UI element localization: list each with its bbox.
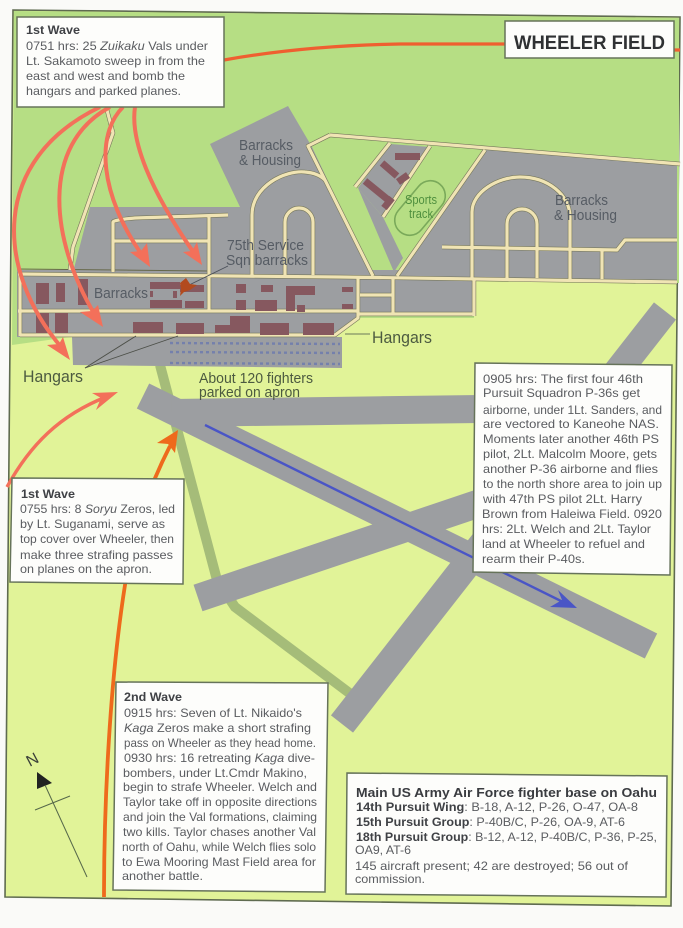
arrow: inbound route line to title: [224, 44, 680, 60]
label: fighters on apron: About 120 fighters: [199, 371, 313, 387]
body text: 0930 hrs: 16 retreating Kaga dive-: [124, 751, 315, 765]
body text: on planes on the apron.: [20, 562, 152, 576]
callout: 0905 hrs: airborne, under 1Lt. Sanders, and: [483, 403, 662, 417]
body text: 0915 hrs: Seven of Lt. Nikaido's: [124, 706, 302, 720]
map labels: Barracks: [555, 193, 608, 209]
map labels: Sqn barracks: [226, 253, 308, 269]
callout: 0905 hrs: hrs: 2Lt. Welch and 2Lt. Taylor: [482, 522, 651, 536]
runways: [143, 311, 665, 724]
body text: by Lt. Suganami, serve as: [20, 517, 165, 531]
unit list: 14th Pursuit Wing : B-18, A-12, P-26, O-47, OA-8: [356, 800, 638, 814]
callout: 2nd Wave: [113, 682, 328, 892]
callout: 0905 hrs: land at Wheeler to refuel and: [482, 537, 645, 551]
callout: 0905 hrs: Brown from Haleiwa Field. 0920: [482, 507, 662, 521]
body text: make three strafing passes: [20, 548, 173, 562]
arrow: US fighter take-off: [205, 425, 577, 608]
body text: [20, 502, 175, 576]
body text: Taylor take off in opposite directions: [123, 795, 317, 809]
arrows: first wave bomb runs: [14, 107, 194, 348]
label: hangars left with leader lines: Hangars: [23, 367, 83, 386]
icon: north arrow: N: [24, 750, 42, 771]
arrow: Soryu Zeros: [7, 392, 118, 487]
callout: 1st Wave Soryu: [10, 478, 184, 584]
body text: another battle.: [122, 869, 203, 883]
unit list: [355, 800, 657, 886]
unit list: 145 aircraft present; 42 are destroyed; 56 out of: [355, 859, 629, 873]
callout: 0905 hrs: 0905 hrs: The first four 46th: [483, 372, 643, 386]
map labels: [94, 138, 617, 302]
callout: 1st Wave Zuikaku: [17, 17, 224, 107]
callout: 0905 hrs: pilot, 2Lt. Malcolm Moore, gets: [483, 447, 657, 461]
base grey areas: [17, 106, 677, 368]
label: hangars right with leader line: [345, 328, 432, 347]
callout: 0905 hrs: another P-36 airborne and flies: [483, 462, 658, 476]
body text: and join the Val formations, claiming: [123, 810, 317, 824]
body text: [26, 39, 208, 98]
label: hangars left with leader lines: [23, 336, 178, 386]
sports track: Sports: [405, 192, 437, 207]
unit list: 15th Pursuit Group : P-40B/C, P-26, OA-9, AT-6: [356, 815, 625, 829]
label: fighters on apron: [199, 371, 313, 401]
body text: top cover over Wheeler, then: [20, 532, 174, 546]
road network: [17, 110, 680, 336]
map labels: Barracks: [94, 286, 148, 302]
callout: 0905 hrs: rearm their P-40s.: [482, 552, 585, 566]
body text: bombers, under Lt.Cmdr Makino,: [123, 766, 307, 780]
heading: 1st Wave: [26, 23, 80, 37]
unit list: commission.: [355, 872, 425, 886]
label: hangars right with leader line: Hangars: [372, 328, 432, 347]
body text: hangars and parked planes.: [26, 84, 181, 98]
arrow: 75th Service Sqn leader and hit marker: [180, 266, 228, 296]
arrowheads: first wave bomb runs: [47, 242, 202, 360]
map labels: & Housing: [554, 208, 617, 224]
unit list: 18th Pursuit Group : B-12, A-12, P-40B/C, P-36, P-25,: [356, 830, 657, 844]
map labels: 75th Service: [227, 238, 304, 254]
arrow: second wave approach: [104, 430, 178, 897]
heading: Main US Army Air Force fighter base on Oahu: [356, 785, 657, 800]
body text: 0751 hrs: 25 Zuikaku Vals under: [26, 39, 208, 53]
body text: Lt. Sakamoto sweep in from the: [26, 54, 205, 68]
body text: [122, 706, 317, 883]
body text: begin to strafe Wheeler. Welch and: [123, 780, 317, 794]
body text: east and west and bomb the: [26, 69, 185, 83]
label: fighters on apron: parked on apron: [199, 385, 300, 401]
body text: pass on Wheeler as they head home.: [124, 736, 316, 750]
sports track: [389, 175, 451, 241]
callout: 0905 hrs: Pursuit Squadron P-36s get: [483, 386, 641, 400]
parked fighters on apron: [170, 343, 340, 364]
sports track: track: [409, 206, 433, 221]
heading: 1st Wave: [21, 487, 75, 501]
body text: Kaga Zeros make a short strafing: [124, 721, 311, 735]
unit list: OA9, AT-6: [355, 843, 411, 857]
callout: base summary: [346, 773, 667, 897]
callout: 0905 hrs: with 47th PS pilot 2Lt. Harry: [482, 492, 642, 506]
heading: 2nd Wave: [124, 690, 182, 704]
callout: 0905 hrs: to the north shore area to join up: [483, 477, 662, 491]
body text: 0755 hrs: 8 Soryu Zeros, led: [20, 502, 175, 516]
body text: to Ewa Mooring Mast Field area for: [122, 855, 316, 869]
buildings: [36, 153, 420, 335]
title: [505, 21, 674, 58]
map labels: & Housing: [239, 153, 301, 169]
callout: 0905 hrs: are vectored to Kaneohe NAS.: [483, 417, 659, 431]
callout: 0905 hrs: [473, 363, 672, 575]
body text: two kills. Taylor chases another Val: [123, 825, 316, 839]
callout: 0905 hrs: Moments later another 46th PS: [483, 432, 659, 446]
icon: north arrow: [24, 750, 87, 877]
taxiway: [160, 365, 352, 695]
title: WHEELER FIELD: [514, 33, 665, 54]
map labels: Barracks: [239, 138, 293, 154]
body text: north of Oahu, while Welch flies solo: [122, 840, 316, 854]
